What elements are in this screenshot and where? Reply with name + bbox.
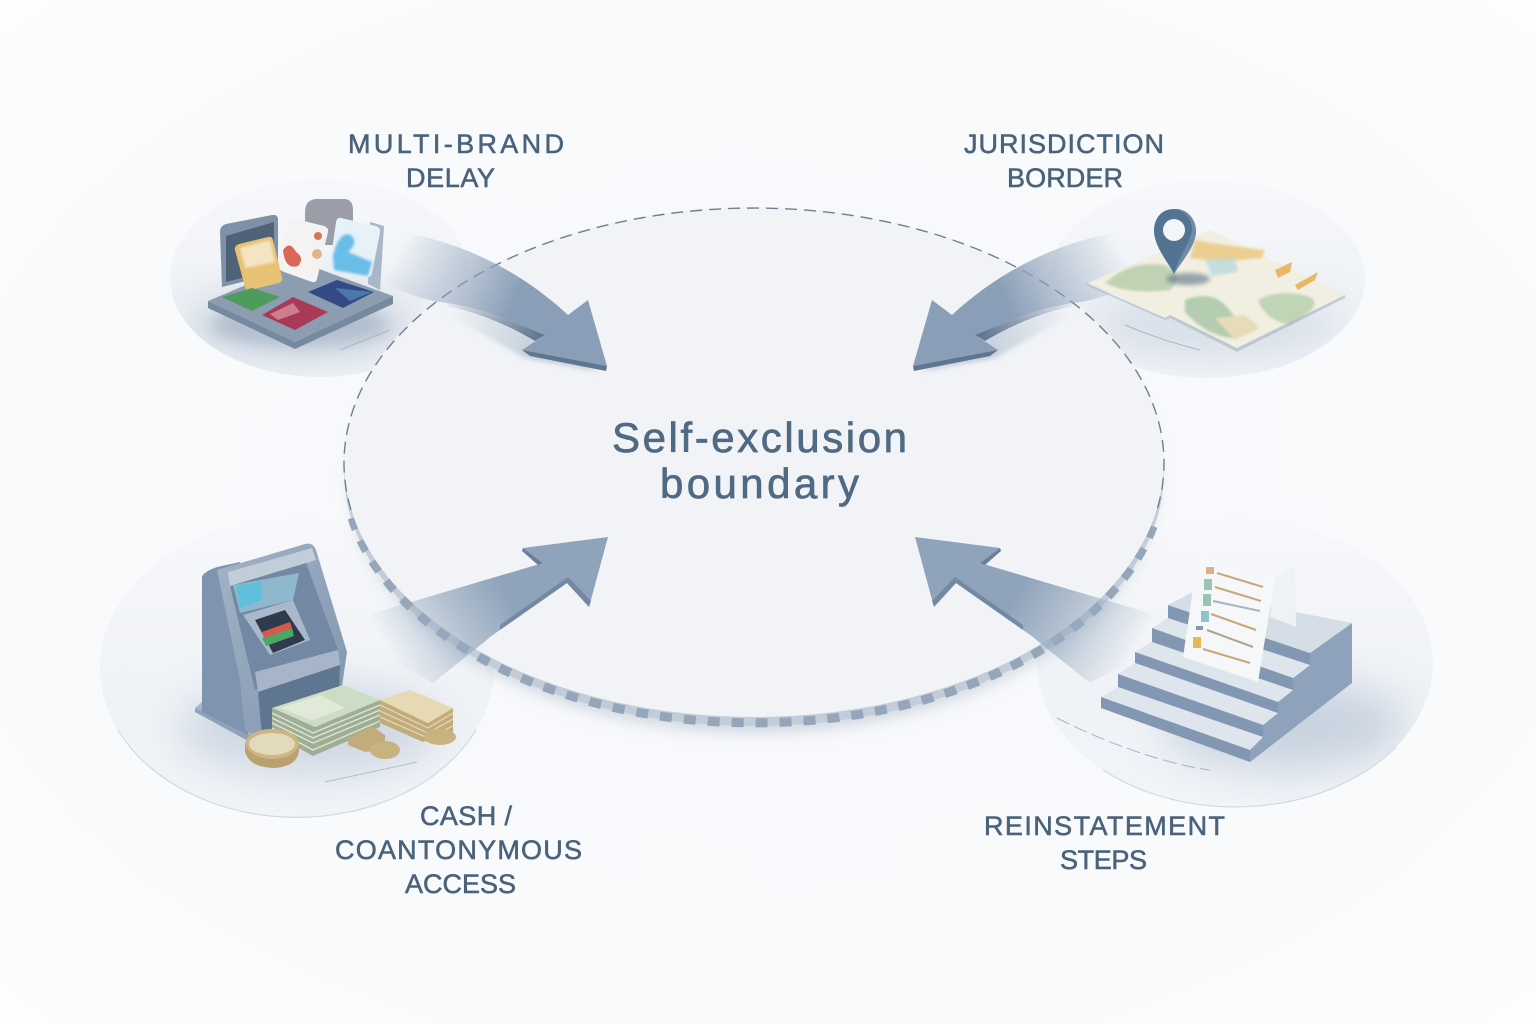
heading: self-exclusion boundary (612, 414, 907, 507)
label: multi-brand delay: MULTI-BRAND (348, 129, 564, 159)
disc: jurisdiction (1075, 262, 1364, 378)
icon: ATM with cash and coins (195, 544, 456, 782)
label: reinstatement steps (984, 811, 1225, 875)
label: cash / anonymous access: CASH / (420, 801, 512, 831)
label: multi-brand delay (348, 129, 564, 193)
arrow: reinstatement to centre (915, 537, 1165, 683)
label: jurisdiction border: JURISDICTION (964, 129, 1164, 159)
disc: multi-brand (170, 254, 436, 377)
disc: cash (100, 648, 492, 818)
label: jurisdiction border (964, 129, 1164, 193)
label: reinstatement steps: STEPS (1060, 845, 1147, 875)
arrow: cash to centre (358, 537, 608, 683)
label: reinstatement steps: REINSTATEMENT (984, 811, 1225, 841)
arrow: jurisdiction to centre (913, 233, 1145, 372)
icon: map with location pin (1085, 209, 1345, 352)
icon: stairs with checklist (1057, 555, 1352, 770)
disc: reinstatement (1038, 644, 1432, 808)
label: cash / anonymous access: ACCESS (405, 869, 516, 899)
arrow: multi-brand to centre (375, 233, 607, 372)
label: multi-brand delay: DELAY (406, 163, 495, 193)
icon: tray with brand cards (208, 199, 393, 350)
boundary oval (344, 207, 1164, 732)
label: cash / anonymous access (335, 801, 582, 899)
label: jurisdiction border: BORDER (1007, 163, 1123, 193)
heading: self-exclusion boundary: boundary (660, 460, 859, 507)
heading: self-exclusion boundary: Self-exclusion (612, 414, 907, 461)
label: cash / anonymous access: COANTONYMOUS (335, 835, 582, 865)
